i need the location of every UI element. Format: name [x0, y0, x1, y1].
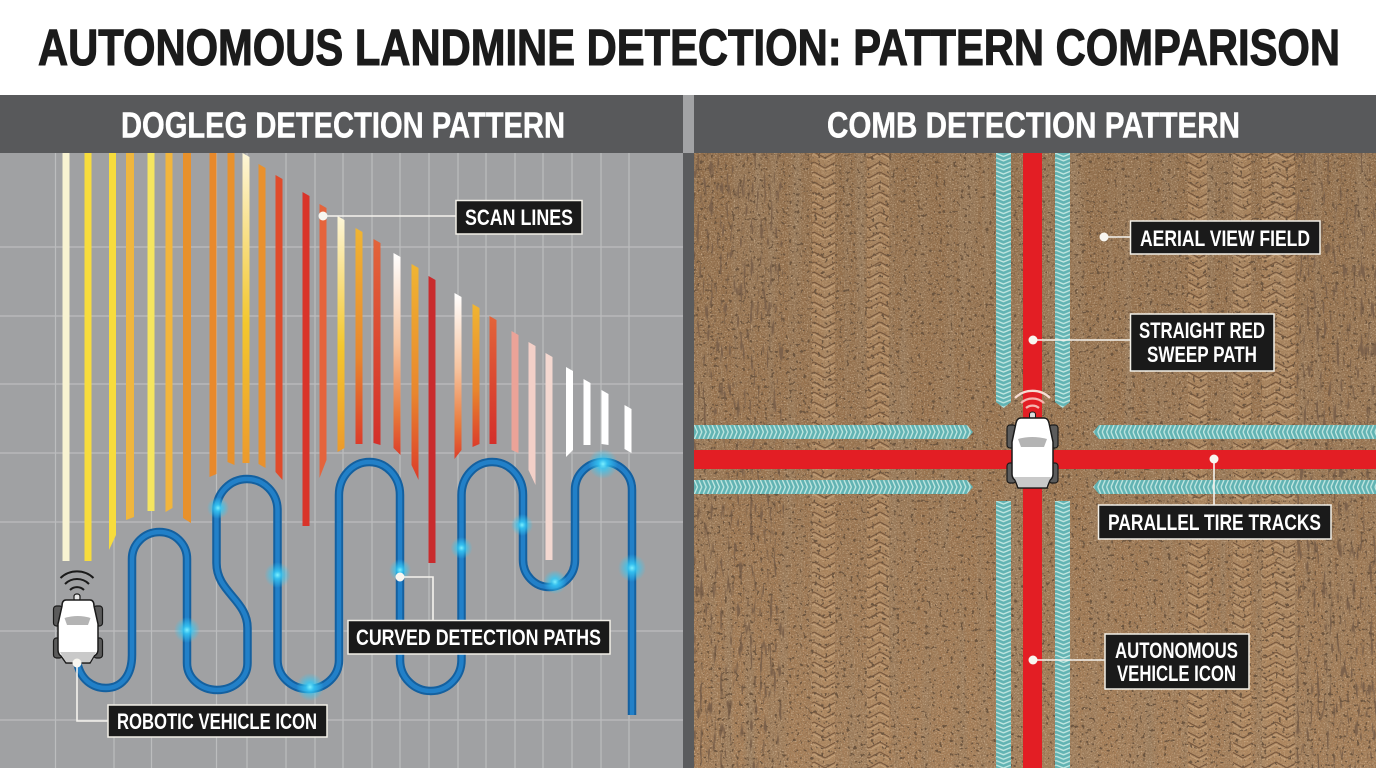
callout: autonomous vehicle icon: VEHICLE ICON — [1117, 661, 1236, 686]
panel divider — [683, 95, 694, 768]
parallel tire tracks — [694, 153, 1376, 768]
icon: autonomous vehicle — [1007, 391, 1058, 488]
callout: aerial view field: AERIAL VIEW FIELD — [1140, 226, 1310, 251]
callout: curved detection paths — [348, 572, 610, 654]
glowing path nodes — [174, 449, 646, 701]
callout: robotic vehicle icon: ROBOTIC VEHICLE ICON — [117, 709, 317, 734]
callout: scan lines — [318, 200, 582, 234]
callout: straight red sweep path: SWEEP PATH — [1147, 342, 1257, 367]
callout: curved detection paths: CURVED DETECTION PATHS — [356, 625, 601, 650]
callout: aerial view field — [1100, 221, 1320, 254]
callout: parallel tire tracks: PARALLEL TIRE TRACKS — [1108, 510, 1321, 535]
callout: straight red sweep path — [1028, 314, 1274, 371]
soil field background — [694, 153, 1376, 768]
panel: dogleg detection pattern — [0, 95, 683, 768]
callout: scan lines: SCAN LINES — [465, 205, 573, 230]
icon: robotic vehicle — [54, 571, 102, 663]
heading bar: dogleg — [0, 95, 683, 153]
scan lines: descending coloured bars — [62, 153, 632, 563]
heading bar: comb — [694, 95, 1376, 153]
callout: parallel tire tracks — [1098, 454, 1331, 539]
callout: autonomous vehicle icon: AUTONOMOUS — [1115, 638, 1238, 663]
panel background: grey grid — [0, 153, 683, 768]
straight red sweep paths — [694, 153, 1376, 768]
heading bar: comb: COMB DETECTION PATTERN — [827, 104, 1240, 146]
heading bar: dogleg: DOGLEG DETECTION PATTERN — [121, 104, 565, 146]
callout: straight red sweep path: STRAIGHT RED — [1139, 318, 1265, 343]
callout: autonomous vehicle icon — [1028, 634, 1249, 689]
curved blue detection path — [77, 462, 632, 715]
callout: robotic vehicle icon — [72, 658, 327, 737]
panel: comb detection pattern — [694, 95, 1376, 768]
